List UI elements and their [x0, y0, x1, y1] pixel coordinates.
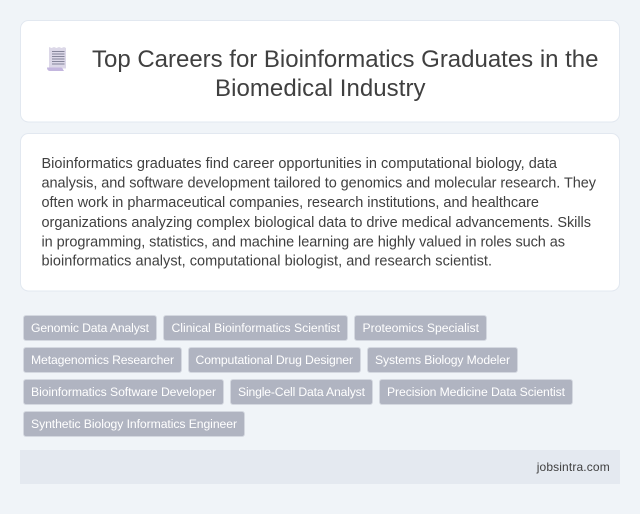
- title: Biomedical Industry: [215, 75, 426, 102]
- tag: Proteomics Specialist: [354, 316, 486, 340]
- text block: description: in programming, statistics, and machine learning are highly valued in roles such as: [42, 234, 565, 250]
- tag: Single-Cell Data Analyst: Single-Cell Data Analyst: [238, 385, 366, 399]
- text block: description: often work in pharmaceutical companies, research institutions, and healthcare: [42, 195, 539, 211]
- tag: Genomic Data Analyst: [24, 316, 156, 340]
- tag: Computational Drug Designer: [188, 348, 360, 372]
- tag: Systems Biology Modeler: Systems Biology Modeler: [375, 353, 510, 367]
- tag: Metagenomics Researcher: [24, 348, 182, 372]
- tag: Proteomics Specialist: Proteomics Specialist: [362, 321, 480, 335]
- tag: Bioinformatics Software Developer: [24, 380, 224, 404]
- footer source text: jobsintra.com: [536, 460, 610, 474]
- title: Top Careers for Bioinformatics Graduates in the: [92, 46, 598, 73]
- text block: description: bioinformatics analyst, computational biologist, and research scientist.: [42, 254, 492, 270]
- tag: Metagenomics Researcher: Metagenomics Researcher: [31, 353, 174, 367]
- tag: Clinical Bioinformatics Scientist: [164, 316, 348, 340]
- icon: document scroll: [47, 47, 66, 71]
- tag: Synthetic Biology Informatics Engineer: Synthetic Biology Informatics Engineer: [31, 417, 237, 431]
- panel: career tags: [24, 316, 572, 436]
- panel: header card: [20, 20, 620, 122]
- title: [92, 46, 598, 102]
- tag: Systems Biology Modeler: [368, 348, 518, 372]
- tag: Clinical Bioinformatics Scientist: Clinical Bioinformatics Scientist: [172, 321, 341, 335]
- text block: description: Bioinformatics graduates find career opportunities in computational biology, data: [42, 156, 558, 172]
- text block: description: analysis, and software development tailored to genomics and molecular research. They: [42, 176, 597, 192]
- tag: Computational Drug Designer: Computational Drug Designer: [196, 353, 353, 367]
- tag: Precision Medicine Data Scientist: Precision Medicine Data Scientist: [387, 385, 566, 399]
- panel: description card: [20, 134, 620, 291]
- text block: description: [42, 156, 597, 270]
- tag: Synthetic Biology Informatics Engineer: [24, 412, 244, 436]
- text block: description: organizations analyzing complex biological data to drive medical advancements. Skills: [42, 215, 591, 231]
- tag: Bioinformatics Software Developer: Bioinformatics Software Developer: [31, 385, 216, 399]
- tag: Single-Cell Data Analyst: [230, 380, 372, 404]
- footer bar: [20, 450, 620, 484]
- tag: Precision Medicine Data Scientist: [380, 380, 572, 404]
- tag: Genomic Data Analyst: Genomic Data Analyst: [31, 321, 150, 335]
